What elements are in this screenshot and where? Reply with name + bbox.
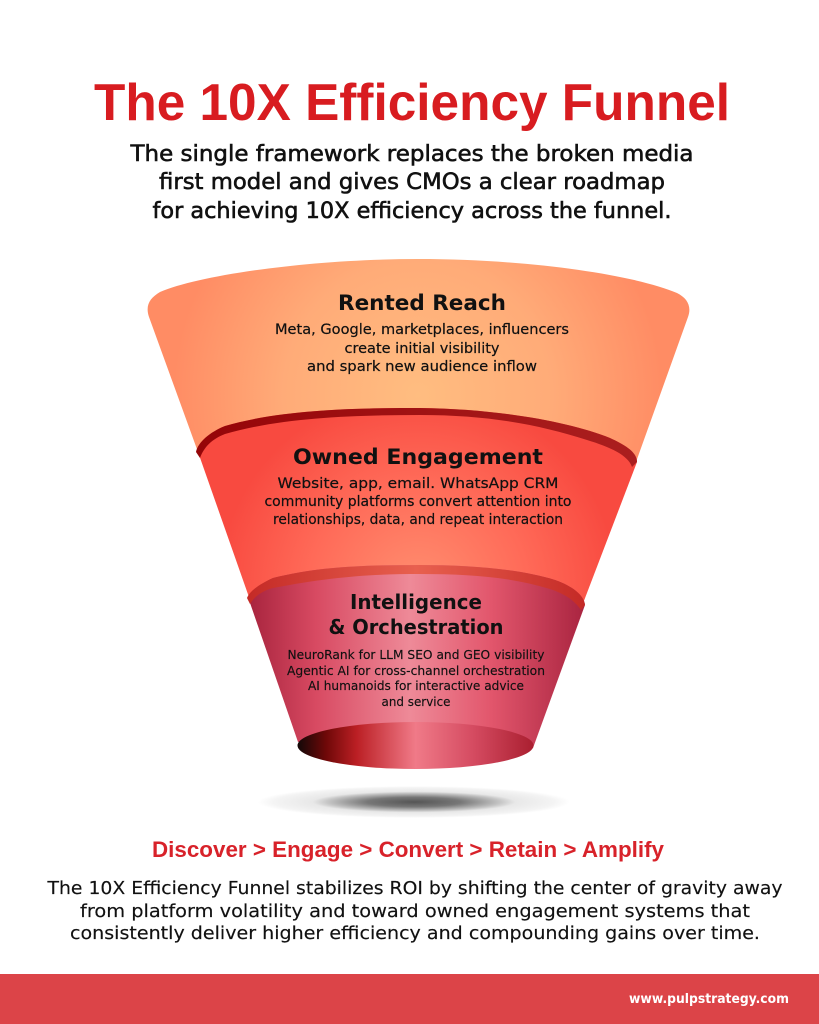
funnel shadow — [258, 786, 570, 818]
funnel segment: owned engagement: relationships, data, and repeat interaction — [273, 512, 563, 528]
stage sequence: Discover > Engage > Convert > Retain > Amplify — [152, 837, 665, 862]
intro paragraph: for achieving 10X efficiency across the funnel. — [152, 198, 672, 224]
funnel segment: rented reach: Rented Reach — [338, 291, 506, 315]
funnel segment: intelligence and orchestration: AI humanoids for interactive advice — [308, 678, 524, 693]
funnel segment: owned engagement: community platforms convert attention into — [264, 494, 572, 510]
intro paragraph: first model and gives CMOs a clear roadmap — [159, 169, 665, 195]
funnel segment: owned engagement: Website, app, email. WhatsApp CRM — [278, 476, 558, 492]
funnel opening — [298, 722, 534, 769]
funnel segment: rented reach: and spark new audience inflow — [307, 359, 537, 375]
funnel segment: intelligence and orchestration — [247, 565, 585, 769]
summary paragraph: from platform volatility and toward owned engagement systems that — [80, 901, 750, 922]
funnel segment: owned engagement: Owned Engagement — [293, 445, 543, 469]
title: The 10X Efficiency Funnel — [94, 74, 730, 132]
funnel — [148, 259, 689, 769]
summary paragraph: The 10X Efficiency Funnel stabilizes ROI by shifting the center of gravity away — [46, 878, 783, 899]
funnel segment: intelligence and orchestration: NeuroRank for LLM SEO and GEO visibility — [288, 647, 545, 662]
funnel segment: intelligence and orchestration: Agentic AI for cross-channel orchestration — [287, 663, 545, 678]
funnel segment: owned engagement — [196, 408, 637, 606]
funnel segment: rented reach: create initial visibility — [344, 341, 500, 357]
summary paragraph — [46, 878, 783, 944]
summary paragraph: consistently deliver higher efficiency and compounding gains over time. — [70, 923, 760, 944]
funnel segment: intelligence and orchestration: & Orchestration — [328, 615, 504, 639]
intro paragraph — [129, 141, 693, 224]
funnel segment: rented reach — [148, 259, 689, 462]
funnel segment: rented reach: Meta, Google, marketplaces, influencers — [275, 322, 569, 338]
intro paragraph: The single framework replaces the broken media — [129, 141, 693, 167]
footer bar — [0, 974, 819, 1024]
funnel segment: intelligence and orchestration: and service — [382, 694, 451, 709]
funnel segment: intelligence and orchestration: Intelligence — [350, 590, 482, 614]
website url: www.pulpstrategy.com — [629, 992, 789, 1007]
